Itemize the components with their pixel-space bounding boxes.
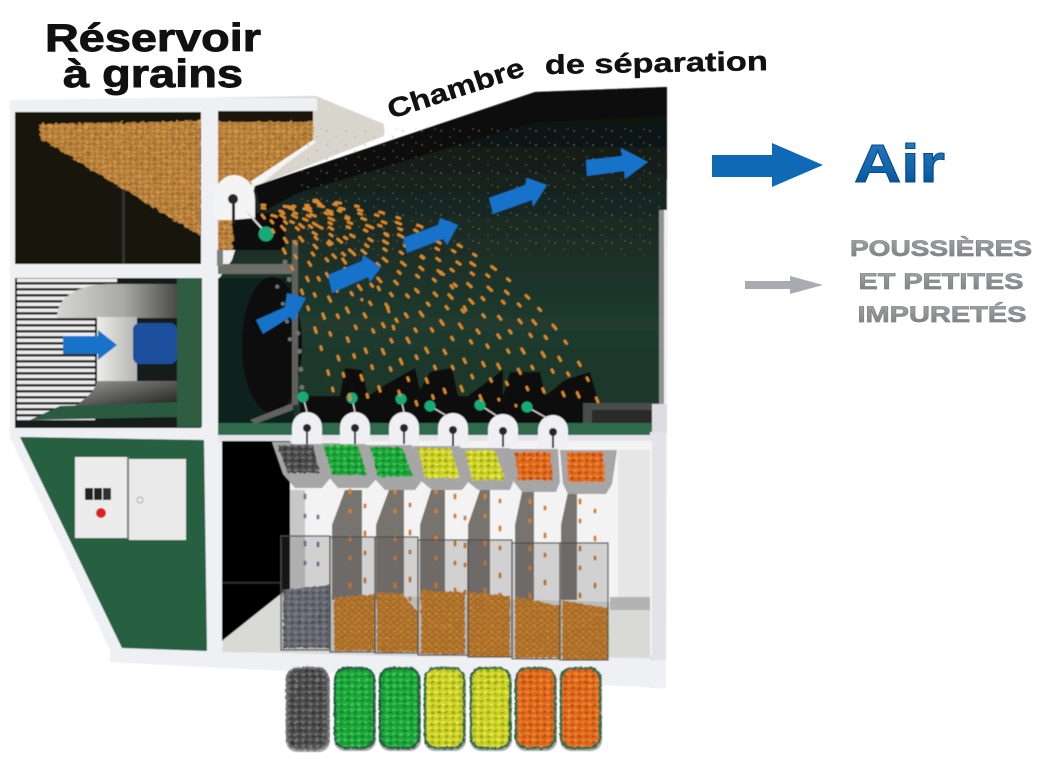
machine frame <box>10 96 668 688</box>
control cabinet <box>75 457 186 540</box>
capsule: yellow 1 <box>425 668 464 748</box>
tray 1 <box>272 442 332 488</box>
capsule: green 2 <box>380 668 419 748</box>
title: réservoir à grains: à grains <box>63 53 243 96</box>
capsule: orange 2 <box>561 668 600 748</box>
title: chambre de séparation: de séparation <box>545 46 768 80</box>
arrow: air flow 2 <box>328 255 381 293</box>
capsule: grey <box>287 668 328 749</box>
collecting bins: grey chutes <box>290 490 577 600</box>
sorting flap wheels <box>292 412 568 448</box>
arrow: air flow 5 <box>586 148 648 179</box>
legend: dust label: IMPURETÉS <box>858 302 1026 327</box>
capsule: green 1 <box>335 668 374 748</box>
flap levers with green balls <box>298 392 547 418</box>
tray 7 <box>560 450 617 494</box>
panel: dark base of chamber <box>300 368 659 424</box>
frame: floor of chamber <box>218 404 667 688</box>
title: chambre de séparation: Chambre <box>384 52 528 125</box>
tray 6 <box>510 449 560 492</box>
tray 4 <box>413 446 470 490</box>
frame: bottom rail <box>218 652 666 688</box>
title: réservoir à grains <box>45 17 261 96</box>
machine diagram <box>10 87 668 752</box>
panel: collection chamber <box>222 441 652 658</box>
falling grains in bins <box>305 490 595 600</box>
panel: separation chamber <box>216 87 667 424</box>
title: chambre de séparation <box>384 46 768 125</box>
feeder wheel <box>214 175 274 242</box>
legend: dust label: POUSSIÈRES <box>850 236 1032 261</box>
panel: fan compartment <box>15 278 202 428</box>
legend: air label: Air <box>854 134 945 194</box>
legend: dust label <box>850 236 1032 327</box>
title: réservoir à grains: Réservoir <box>45 17 261 60</box>
icon: blue motor <box>133 323 177 364</box>
bagged grain capsules <box>286 668 602 752</box>
legend: air arrow <box>712 143 823 187</box>
arrow: air flow 1 <box>256 293 306 334</box>
arrow: air intake <box>63 330 117 360</box>
panel: green control section <box>20 437 207 651</box>
bin contents <box>283 585 608 660</box>
legend: dust arrow <box>745 276 823 294</box>
panel: upper left grain reservoir <box>15 112 201 265</box>
capsule shadows <box>286 670 602 752</box>
tray 5 <box>460 448 514 490</box>
tray 3 <box>365 445 424 490</box>
bins: transparent walls <box>281 536 608 660</box>
arrow: air flow 3 <box>403 218 458 253</box>
panel: hopper <box>217 96 384 190</box>
capsule: orange 1 <box>516 668 555 748</box>
tray 2 <box>318 443 378 488</box>
arrow: air flow 4 <box>489 178 547 214</box>
capsule: yellow 2 <box>471 668 510 748</box>
grain trajectories <box>255 200 598 406</box>
chutes: trays with separated grain <box>272 442 617 494</box>
frame bars between chambers <box>10 100 223 666</box>
dust falling <box>270 262 302 390</box>
legend: dust label: ET PETITES <box>858 269 1024 294</box>
